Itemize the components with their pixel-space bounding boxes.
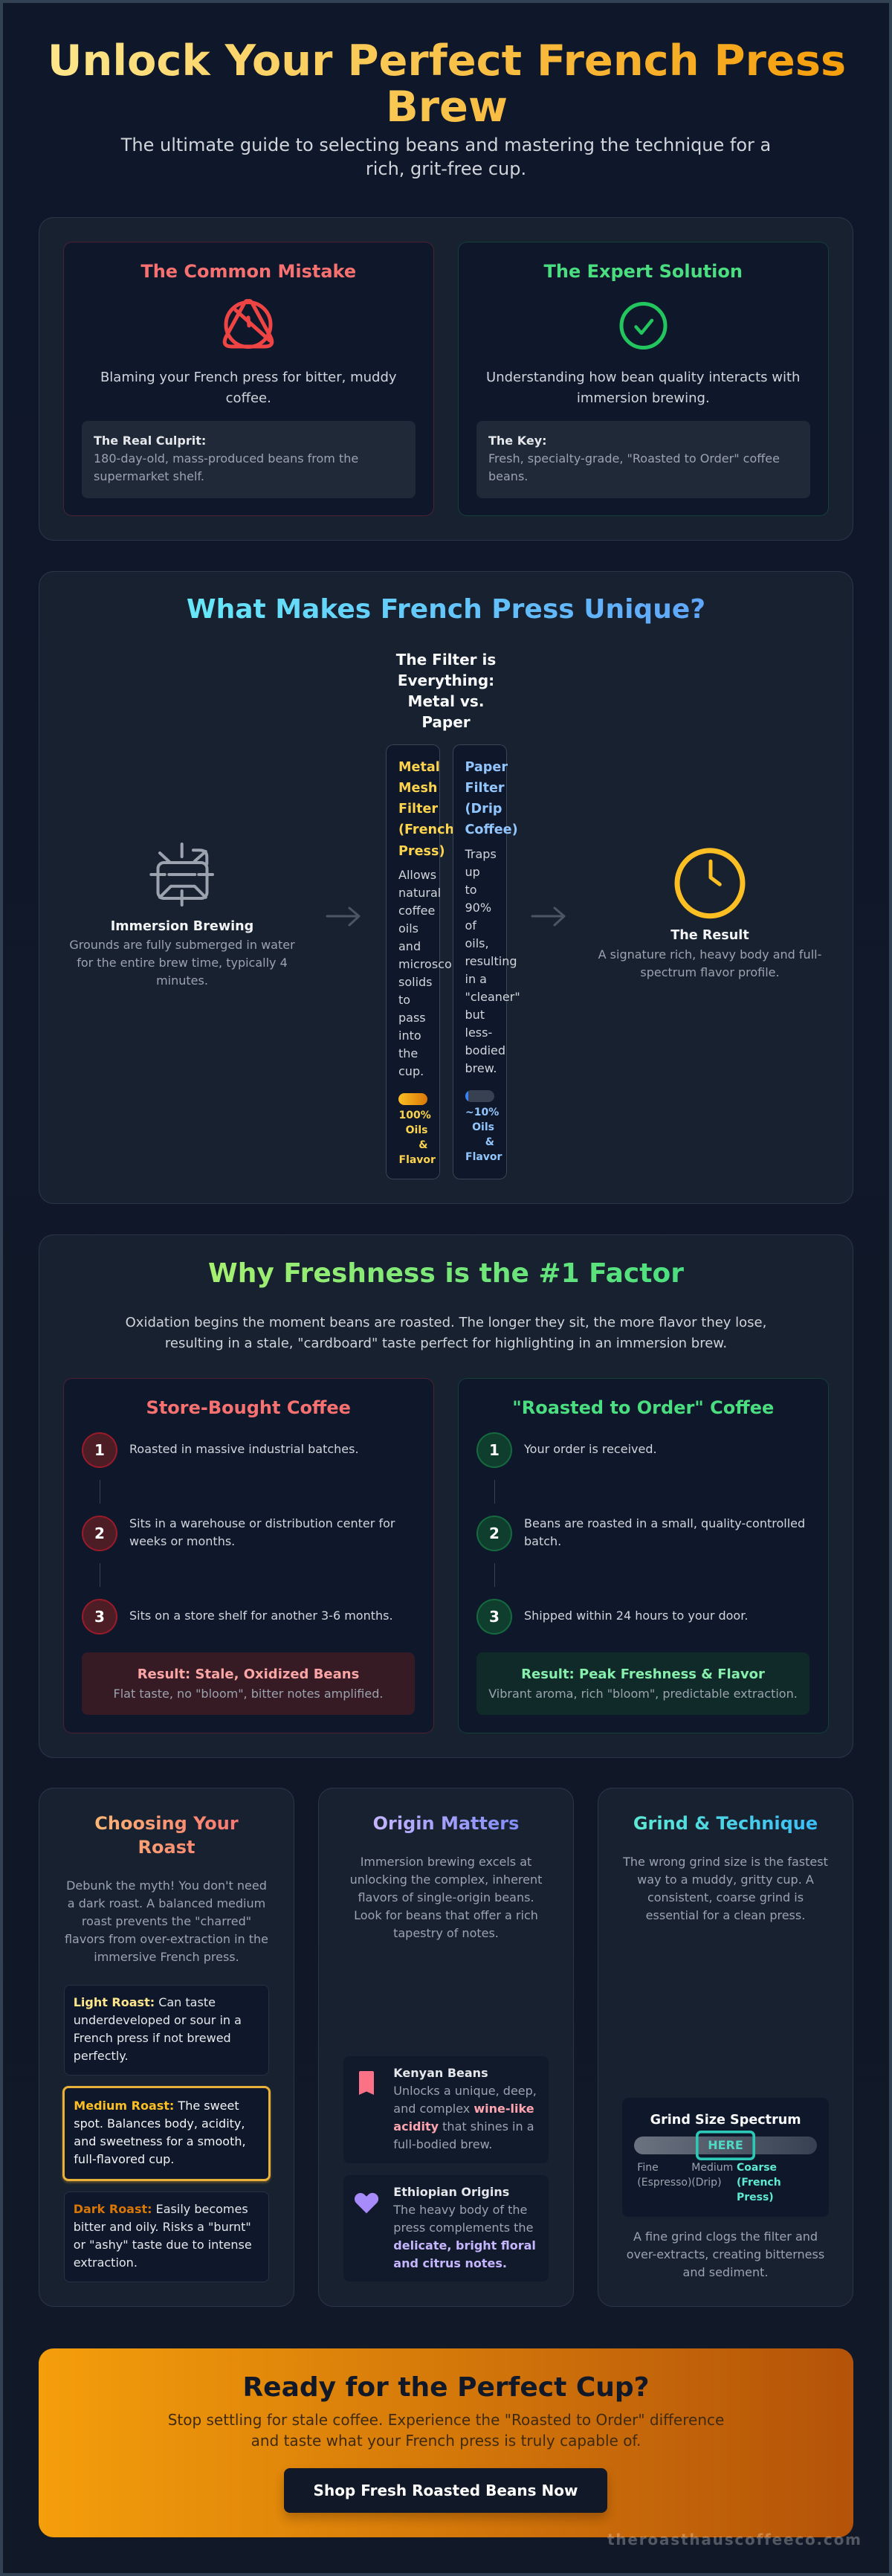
panel: call to action: [39, 2348, 853, 2537]
label: 10 percent oils and flavor: &: [485, 1136, 494, 1148]
heading: metal mesh filter: Metal: [398, 760, 440, 775]
card: light roast: underdeveloped or sour in a: [74, 2013, 242, 2027]
card: medium roast: spot. Balances body, acidity,: [74, 2116, 245, 2131]
step 3: [476, 1599, 512, 1635]
text: metal filter description: solids: [398, 975, 433, 989]
ethiopian text: press complements the: [393, 2221, 533, 2235]
text: roast intro: Debunk the myth! You don't need: [66, 1878, 267, 1893]
text: result description: [598, 947, 821, 979]
text: grind note: over-extracts, creating bitterness: [627, 2247, 824, 2261]
step 2 text: Beans are roasted in a small, quality-controlled: [524, 1516, 805, 1530]
text: metal filter description: [398, 868, 469, 1078]
panel: what makes french press unique: [39, 571, 853, 1204]
kenyan title: Kenyan Beans: [393, 2066, 488, 2080]
step 1: [82, 1432, 117, 1468]
label: medium: Medium: [691, 2162, 733, 2174]
label: coarse: Press): [737, 2192, 774, 2203]
kenyan text: [393, 2084, 537, 2151]
heading: paper filter: Coffee): [465, 822, 518, 837]
step 3: [82, 1599, 117, 1635]
callout text: supermarket shelf.: [94, 469, 204, 483]
panel: mistake vs solution: [39, 217, 853, 541]
text: paper filter description: less-: [465, 1025, 492, 1040]
text: paper filter description: of: [465, 918, 476, 933]
text: paper filter description: oils,: [465, 936, 489, 950]
icon: heart: [355, 2192, 379, 2213]
text: metal filter description: coffee: [398, 904, 435, 918]
icon: immersion brewing: [149, 843, 214, 907]
text: call to action: [168, 2411, 724, 2450]
step 1: 1: [489, 1441, 500, 1459]
ethiopian text: The heavy body of the: [393, 2203, 527, 2217]
heading: metal mesh filter: (French: [398, 822, 454, 837]
callout: the real culprit: [82, 421, 416, 498]
text: metal filter description: natural: [398, 886, 441, 900]
subtitle: rich, grit-free cup.: [366, 158, 526, 179]
heading: choosing your roast: Choosing Your: [94, 1813, 239, 1834]
text: origin intro: [350, 1855, 542, 1940]
label: coarse: Coarse: [737, 2162, 777, 2174]
step 2 text: [524, 1516, 805, 1548]
subtitle: [120, 135, 771, 179]
text: grind note: and sediment.: [683, 2265, 768, 2279]
label: immersion brewing: Immersion Brewing: [111, 919, 253, 934]
icon: broken warning circle: [223, 299, 274, 349]
title: [47, 38, 847, 129]
heading: metal mesh filter: Mesh: [398, 781, 437, 796]
label: 100 percent oils and flavor: 100%: [398, 1110, 431, 1121]
text: paper filter description: in a: [465, 972, 487, 986]
ethiopian text: [393, 2203, 536, 2270]
icon: clock: [675, 848, 745, 919]
heading: metal mesh filter: Filter: [398, 802, 438, 817]
text: oxidation intro: Oxidation begins the moment beans are roasted. The longer they sit, the more flavor they lose,: [126, 1315, 766, 1330]
kenyan text: and complex wine-like: [393, 2102, 534, 2116]
step 1: [476, 1432, 512, 1468]
label: fine: [637, 2162, 691, 2189]
step 1 text: Roasted in massive industrial batches.: [129, 1442, 359, 1456]
step 1 text: Your order is received.: [524, 1442, 657, 1456]
label: coarse: (French: [737, 2177, 781, 2189]
label: 10 percent oils and flavor: Oils: [472, 1121, 494, 1133]
panel: why freshness is the number one factor: [39, 1234, 853, 1758]
card: kenyan beans: [343, 2056, 549, 2163]
text: metal filter description: cup.: [398, 1064, 424, 1078]
ethiopian title: Ethiopian Origins: [393, 2185, 509, 2199]
step 3: 3: [94, 1608, 105, 1626]
text: metal filter description: oils: [398, 921, 418, 936]
heading: the expert solution: The Expert Solution: [544, 261, 743, 282]
kenyan text: acidity that shines in a: [393, 2119, 534, 2134]
text: metal filter description: pass: [398, 1011, 426, 1025]
callout heading: The Real Culprit:: [94, 434, 206, 448]
ethiopian text: delicate, bright floral: [393, 2238, 536, 2253]
label: 10 percent oils and flavor: ~10%: [465, 1107, 499, 1118]
text: paper filter description: resulting: [465, 954, 517, 968]
heading: filter comparison: [395, 651, 496, 731]
icon: bookmark: [359, 2071, 374, 2095]
heading: filter comparison: The Filter is: [396, 651, 496, 669]
heading: filter comparison: Everything:: [398, 672, 494, 689]
text: origin intro: unlocking the complex, inherent: [350, 1873, 542, 1887]
kenyan text: full-bodied brew.: [393, 2137, 492, 2151]
text: paper filter description: up: [465, 865, 480, 879]
callout text: [488, 451, 780, 483]
step 3 text: Sits on a store shelf for another 3-6 months.: [129, 1609, 393, 1623]
card: ethiopian origins: [343, 2175, 549, 2282]
text: paper filter description: 90%: [465, 901, 491, 915]
label: fine: Fine: [637, 2162, 659, 2174]
panel: choosing your roast: [39, 1788, 294, 2307]
heading: choosing your roast: Roast: [138, 1837, 195, 1858]
text: call to action: Stop settling for stale coffee. Experience the "Roasted to Order" difference: [168, 2411, 724, 2429]
kenyan text: Unlocks a unique, deep,: [393, 2084, 537, 2098]
step 2: 2: [94, 1524, 105, 1542]
label: medium: (Drip): [691, 2177, 722, 2189]
step 2: [476, 1516, 512, 1551]
callout text: 180-day-old, mass-produced beans from the: [94, 451, 358, 466]
text: paper filter description: to: [465, 883, 477, 897]
text: origin intro: Look for beans that offer a rich: [354, 1908, 538, 1922]
step 2 text: weeks or months.: [129, 1534, 235, 1548]
card: medium roast: Medium Roast: The sweet: [74, 2099, 239, 2113]
text: grind note: [627, 2229, 824, 2279]
button: shop fresh roasted beans: [284, 2468, 607, 2513]
panel: the common mistake: [63, 242, 434, 516]
meter: 10 percent oils: [465, 1090, 494, 1102]
text: metal filter description: and: [398, 939, 421, 953]
label: 10 percent oils and flavor: [465, 1107, 502, 1163]
label: 10 percent oils and flavor: Flavor: [465, 1151, 502, 1163]
result title: Result: Peak Freshness & Flavor: [521, 1666, 765, 1682]
label: fine: (Espresso): [637, 2177, 691, 2189]
text: immersion description: for the entire brew time, typically 4: [77, 956, 288, 970]
marker: here: HERE: [708, 2138, 743, 2152]
step 3: 3: [489, 1608, 500, 1626]
icon: check circle: [620, 302, 668, 350]
label: 100 percent oils and flavor: Oils: [406, 1124, 428, 1136]
card: dark roast: or "ashy" taste due to intense: [74, 2238, 252, 2252]
meter: 100 percent oils: [398, 1093, 427, 1105]
text: metal filter description: the: [398, 1046, 418, 1060]
heading: paper filter: [465, 760, 518, 837]
heading: filter comparison: Metal vs.: [408, 692, 484, 710]
heading: paper filter: Paper: [465, 760, 508, 775]
label: coarse: [737, 2162, 781, 2203]
heading: paper filter: Filter: [465, 781, 505, 796]
step 2 text: batch.: [524, 1534, 561, 1548]
arrow: immersion to filter: [326, 907, 360, 927]
card: dark roast: Dark Roast: Easily becomes: [74, 2202, 248, 2216]
text: paper filter description: Traps: [465, 847, 497, 861]
text: mistake description: coffee.: [226, 390, 271, 406]
text: paper filter description: bodied: [465, 1043, 505, 1057]
text: metal filter description: to: [398, 993, 410, 1007]
callout text: [94, 451, 358, 483]
panel: the expert solution: [458, 242, 828, 516]
callout: the key: [476, 421, 810, 498]
chart: grind size spectrum: [622, 2098, 829, 2217]
text: paper filter description: [465, 847, 520, 1075]
result text: Flat taste, no "bloom", bitter notes amplified.: [114, 1687, 383, 1701]
card: dark roast: bitter and oily. Risks a "burnt": [74, 2220, 251, 2234]
text: roast intro: roast prevents the "charred": [82, 1914, 251, 1928]
panel: store-bought coffee: [63, 1378, 434, 1733]
label: 100 percent oils and flavor: [398, 1110, 436, 1166]
text: metal filter description: into: [398, 1028, 421, 1043]
text: immersion brewing: [69, 919, 295, 988]
step 2: [82, 1516, 117, 1551]
text: roast intro: a dark roast. A balanced medium: [68, 1896, 265, 1910]
text: paper filter description: but: [465, 1008, 485, 1022]
text: immersion description: Grounds are fully submerged in water: [69, 938, 295, 952]
label: 100 percent oils and flavor: &: [418, 1139, 428, 1151]
text: grind intro: essential for a clean press.: [646, 1908, 805, 1922]
arrow: filter to result: [531, 907, 565, 927]
result title: Result: Stale, Oxidized Beans: [138, 1666, 359, 1682]
result text: Vibrant aroma, rich "bloom", predictable extraction.: [488, 1687, 798, 1701]
heading: paper filter: (Drip: [465, 802, 502, 817]
label: 100 percent oils and flavor: Flavor: [398, 1154, 436, 1166]
heading: what makes french press unique: What Makes French Press Unique?: [187, 594, 705, 625]
card: light roast: [64, 1985, 269, 2076]
text: paper filter description: "cleaner": [465, 990, 520, 1004]
heading: ready for the perfect cup: Ready for the Perfect Cup?: [242, 2372, 650, 2403]
callout: stale result: [82, 1652, 415, 1715]
subtitle: The ultimate guide to selecting beans and mastering the technique for a: [121, 135, 771, 155]
label: the result: The Result: [670, 928, 749, 943]
callout text: beans.: [488, 469, 528, 483]
text: solution description: [486, 369, 800, 406]
text: oxidation intro: resulting in a stale, "cardboard" taste perfect for highlighting in an immersion brew.: [165, 1336, 727, 1350]
text: origin intro: Immersion brewing excels at: [361, 1855, 531, 1869]
text: oxidation intro: [126, 1315, 766, 1350]
text: immersion description: [69, 938, 295, 988]
callout: fresh result: [476, 1652, 809, 1715]
spectrum bar: [634, 2137, 817, 2154]
heading: metal mesh filter: [398, 760, 454, 859]
step 1: 1: [94, 1441, 105, 1459]
panel: grind and technique: [598, 1788, 853, 2307]
text: solution description: immersion brewing.: [577, 390, 710, 406]
card: light roast: perfectly.: [74, 2049, 129, 2063]
card: light roast: French press if not brewed: [74, 2031, 231, 2045]
panel: roasted to order coffee: [458, 1378, 828, 1733]
text: metal filter description: microscopic: [398, 957, 469, 971]
callout text: Fresh, specialty-grade, "Roasted to Order" coffee: [488, 451, 780, 466]
step 3 text: Shipped within 24 hours to your door.: [524, 1609, 748, 1623]
text: mistake description: [100, 369, 397, 406]
text: grind note: A fine grind clogs the filter and: [633, 2229, 818, 2244]
text: mistake description: Blaming your French press for bitter, muddy: [100, 369, 397, 385]
callout heading: The Key:: [488, 434, 547, 448]
text: solution description: Understanding how bean quality interacts with: [486, 369, 800, 385]
text: result description: spectrum flavor profile.: [640, 965, 780, 979]
heading: why freshness: Why Freshness is the #1 Factor: [208, 1258, 684, 1289]
watermark: theroasthauscoffeeco.com: [607, 2531, 862, 2548]
text: result description: A signature rich, heavy body and full-: [598, 947, 821, 962]
step 2: 2: [489, 1524, 500, 1542]
text: grind intro: consistent, coarse grind is: [647, 1890, 804, 1904]
panel: metal mesh filter: [386, 744, 440, 1179]
heading: store-bought coffee: Store-Bought Coffee: [146, 1397, 351, 1418]
text: roast intro: [65, 1878, 268, 1964]
step 2 text: Sits in a warehouse or distribution center for: [129, 1516, 395, 1530]
card: medium roast: full-flavored cup.: [74, 2152, 174, 2166]
button: shop fresh roasted beans: Shop Fresh Roasted Beans Now: [314, 2482, 578, 2499]
marker: here: [696, 2131, 755, 2160]
card: medium roast: and sweetness for a smooth,: [74, 2134, 246, 2148]
text: roast intro: flavors from over-extraction in the: [65, 1932, 268, 1946]
text: grind intro: [623, 1855, 828, 1922]
text: origin intro: tapestry of notes.: [393, 1926, 499, 1940]
title: Brew: [386, 82, 508, 132]
heading: filter comparison: Paper: [421, 713, 471, 731]
step 2 text: [129, 1516, 395, 1548]
heading: choosing your roast: [83, 1812, 250, 1860]
text: call to action: and taste what your French press is truly capable of.: [251, 2432, 641, 2450]
card: medium roast: [62, 2086, 271, 2181]
chart title: Grind Size Spectrum: [650, 2113, 801, 2128]
card: dark roast: extraction.: [74, 2255, 138, 2270]
text: origin intro: flavors of single-origin beans.: [358, 1890, 534, 1904]
text: grind intro: The wrong grind size is the fastest: [623, 1855, 828, 1869]
heading: origin matters: Origin Matters: [373, 1813, 519, 1834]
text: grind intro: way to a muddy, gritty cup. A: [637, 1873, 814, 1887]
title: Unlock Your Perfect French Press: [48, 36, 846, 86]
text: immersion description: minutes.: [156, 973, 208, 988]
heading: the common mistake: The Common Mistake: [140, 261, 356, 282]
card: light roast: Light Roast: Can taste: [74, 1995, 216, 2009]
text: the result: [598, 928, 821, 979]
heading: grind and technique: Grind & Technique: [633, 1813, 818, 1834]
label: medium: [691, 2162, 733, 2189]
heading: roasted to order coffee: "Roasted to Order" Coffee: [512, 1397, 774, 1418]
text: paper filter description: brew.: [465, 1061, 497, 1075]
text: metal filter description: Allows: [398, 868, 436, 882]
heading: metal mesh filter: Press): [398, 844, 445, 859]
text: roast intro: immersive French press.: [94, 1950, 239, 1964]
ethiopian text: and citrus notes.: [393, 2256, 507, 2270]
card: dark roast: [64, 2192, 269, 2282]
panel: origin matters: [318, 1788, 574, 2307]
panel: paper filter: [452, 744, 507, 1179]
